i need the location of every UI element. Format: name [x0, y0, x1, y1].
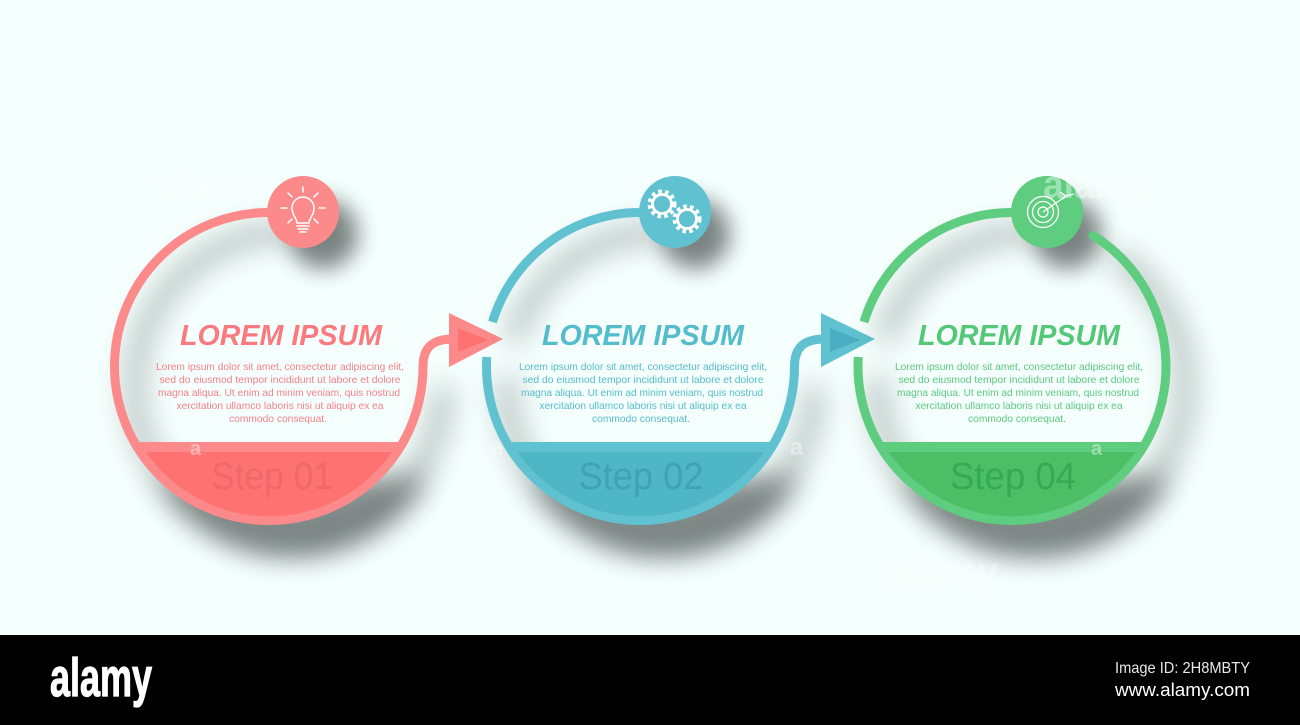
text block 3: sed do eiusmod tempor incididunt ut labore et dolore: [898, 374, 1140, 386]
text block 2: [519, 361, 767, 425]
text block 1: commodo consequat.: [229, 413, 327, 425]
watermarks: [160, 162, 1149, 594]
text block 2: commodo consequat.: [592, 413, 690, 425]
panel: step 2: [487, 176, 875, 556]
image id: Image ID: 2H8MBTY: [1115, 660, 1250, 677]
shadow: step 1 bowl: [159, 478, 427, 556]
step label 2: Step 02: [578, 456, 704, 498]
watermarks: a: [190, 438, 202, 460]
shadow: step 2 ring: [507, 232, 814, 540]
watermarks: alamy: [1043, 163, 1149, 207]
icon badge: target: [1011, 176, 1083, 248]
footer logo: alamy: [50, 648, 152, 708]
text block 1: sed do eiusmod tempor incididunt ut labore et dolore: [160, 374, 401, 386]
website: www.alamy.com: [1114, 680, 1250, 700]
bowl 3: [878, 442, 1146, 520]
shadow: step 3 ring: [878, 232, 1186, 540]
shadow: step 3 bowl: [902, 478, 1170, 556]
icon badge: gears: [639, 176, 711, 248]
watermarks: a: [790, 434, 804, 461]
step label 1: Step 01: [211, 456, 333, 498]
shadow: icon 1: [288, 199, 358, 269]
ring 3 rounded end: [1088, 231, 1098, 240]
text block 2: xercitation ullamco laboris nisi ut aliquip ex ea: [540, 400, 747, 412]
title 3: LOREM IPSUM: [918, 320, 1121, 352]
text block 1: magna aliqua. Ut enim ad minim veniam, quis nostrud: [158, 387, 400, 399]
shadow: icon 2: [660, 199, 730, 269]
arrow 2: [821, 313, 875, 367]
text block 3: [895, 361, 1143, 425]
ring 3: [858, 212, 1166, 520]
watermarks: alamy: [892, 550, 999, 594]
watermarks: alamy: [160, 162, 261, 209]
bowl 1: [135, 442, 403, 520]
text block 2: magna aliqua. Ut enim ad minim veniam, quis nostrud: [521, 387, 763, 399]
footer bar: [0, 635, 1300, 725]
ring with arrow tail 1: [114, 212, 453, 521]
text block 2: sed do eiusmod tempor incididunt ut labore et dolore: [522, 374, 764, 386]
shadow: icon 3: [1032, 199, 1102, 269]
text block 3: commodo consequat.: [968, 413, 1066, 425]
shadow: step 2 bowl: [530, 478, 799, 556]
panel: step 3: [858, 176, 1186, 556]
text block 1: [156, 361, 404, 425]
text block 3: magna aliqua. Ut enim ad minim veniam, quis nostrud: [897, 387, 1139, 399]
arrow 1: [449, 313, 503, 367]
panel: step 1: [114, 176, 503, 556]
title 2: LOREM IPSUM: [542, 320, 745, 352]
text block 3: Lorem ipsum dolor sit amet, consectetur adipiscing elit,: [895, 361, 1143, 373]
watermarks: a: [490, 434, 504, 461]
ring with arrow tail 2: [487, 212, 825, 520]
text block 1: Lorem ipsum dolor sit amet, consectetur adipiscing elit,: [156, 361, 404, 373]
step label 3: Step 04: [950, 456, 1076, 498]
bowl 2: [506, 442, 775, 520]
shadow: step 1 ring: [134, 232, 443, 541]
text block 2: Lorem ipsum dolor sit amet, consectetur adipiscing elit,: [519, 361, 767, 373]
text block 1: xercitation ullamco laboris nisi ut aliquip ex ea: [176, 400, 384, 412]
title 1: LOREM IPSUM: [180, 320, 383, 352]
watermarks: a: [1091, 438, 1103, 460]
icon badge: light bulb: [267, 176, 339, 248]
text block 3: xercitation ullamco laboris nisi ut aliquip ex ea: [916, 400, 1123, 412]
